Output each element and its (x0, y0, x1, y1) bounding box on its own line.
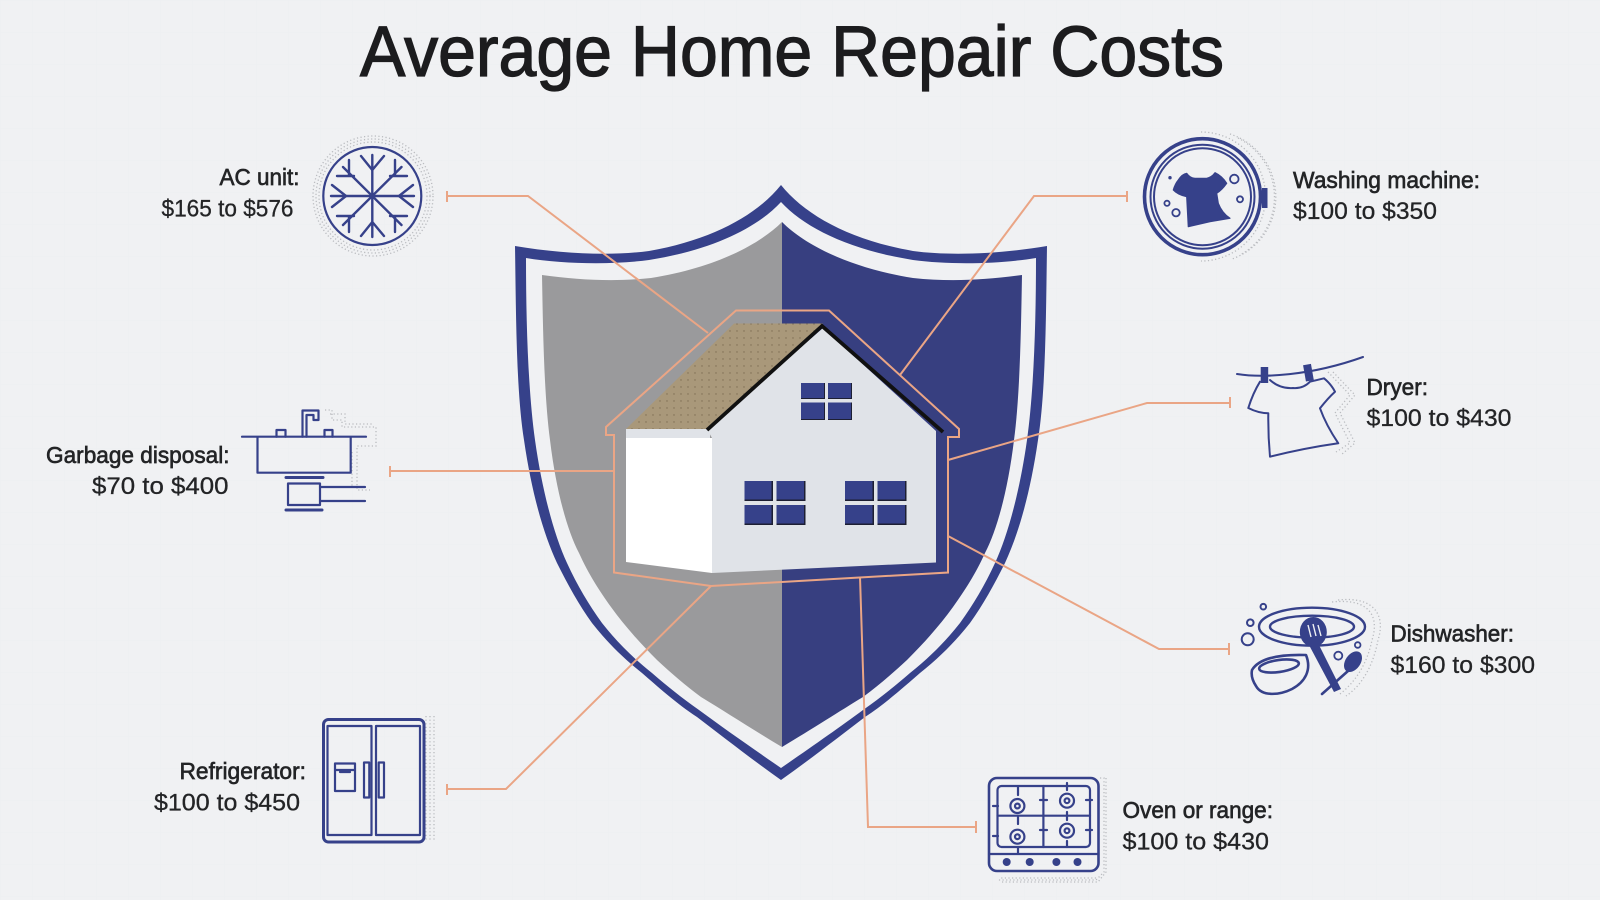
label: oven or range: $100 to $430 (1122, 828, 1269, 856)
label: refrigerator: Refrigerator: (180, 758, 306, 784)
lower left window (744, 481, 806, 525)
shield outer border (515, 185, 1047, 780)
connector: AC unit (447, 191, 708, 333)
label: dishwasher: $160 to $300 (1390, 652, 1535, 679)
connector: washing machine (900, 191, 1127, 375)
icon: washing machine (1144, 132, 1276, 261)
label: AC unit (162, 164, 300, 222)
label: dishwasher: Dishwasher: (1390, 620, 1514, 646)
shield right half navy (782, 222, 1022, 747)
lower right window (845, 481, 906, 525)
connector: refrigerator (447, 586, 711, 795)
label: dryer: Dryer: (1366, 374, 1428, 400)
icon: garbage disposal sink (242, 410, 376, 510)
icon: dryer t-shirt on line (1237, 357, 1363, 457)
white side wall (626, 438, 712, 573)
attic window (801, 383, 852, 420)
icon: dishes (1242, 599, 1380, 696)
label: refrigerator (154, 758, 306, 816)
connector: dishwasher (948, 536, 1229, 655)
label: oven or range (1122, 797, 1273, 856)
label: AC unit: $165 to $576 (162, 196, 294, 222)
house outline (606, 310, 959, 586)
label: garbage disposal (46, 442, 230, 500)
house (626, 324, 943, 573)
label: refrigerator: $100 to $450 (154, 790, 300, 816)
shield left half gray (542, 222, 782, 747)
label: dishwasher (1390, 620, 1535, 679)
label: oven or range: Oven or range: (1122, 797, 1273, 823)
icon: oven or range (989, 778, 1106, 882)
label: dryer (1366, 374, 1512, 432)
label: washing machine (1293, 167, 1480, 225)
roof (626, 324, 823, 429)
label: washing machine: $100 to $350 (1293, 198, 1437, 225)
front wall (707, 328, 936, 573)
label: garbage disposal: Garbage disposal: (46, 442, 230, 468)
icon: AC snowflake (313, 136, 433, 256)
title: Average Home Repair Costs (360, 13, 1224, 92)
connector: oven or range (860, 577, 976, 833)
icon: refrigerator (324, 716, 434, 842)
label: dryer: $100 to $430 (1366, 405, 1512, 432)
label: AC unit: AC unit: (220, 164, 300, 190)
connector: dryer (948, 397, 1230, 460)
shield (515, 185, 1047, 780)
shield inner band (526, 202, 1036, 768)
label: washing machine: Washing machine: (1293, 167, 1480, 193)
side wall strip (626, 429, 710, 438)
roof edge (707, 326, 943, 432)
connector: garbage disposal (390, 466, 614, 477)
label: garbage disposal: $70 to $400 (92, 473, 228, 500)
